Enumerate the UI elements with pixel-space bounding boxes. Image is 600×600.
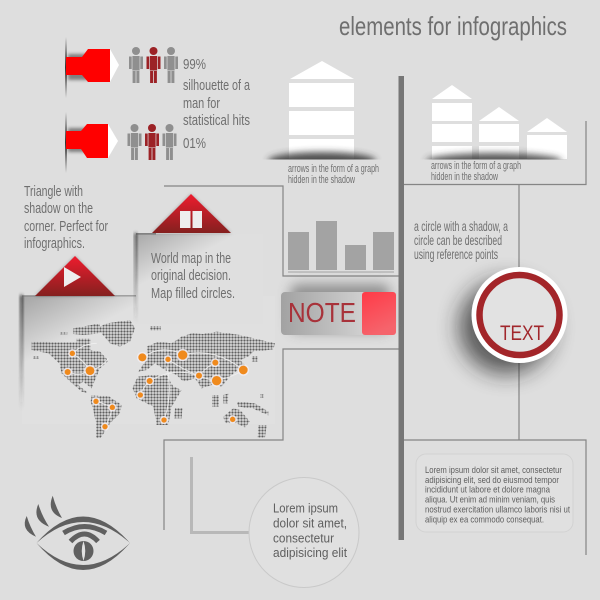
lorem circle — [249, 478, 359, 588]
left graph caption: arrows in the form of a graph — [288, 163, 379, 175]
paper panel upper — [134, 233, 263, 324]
route lines — [68, 343, 243, 427]
icon: eye — [25, 496, 130, 570]
statistics text: man for — [183, 95, 220, 112]
right graph caption — [431, 160, 521, 183]
house arrow graph left — [268, 61, 376, 170]
location markers — [65, 350, 248, 429]
lorem text box: aliquip ex ea commodo consequat. — [425, 514, 544, 526]
circle description: using reference points — [414, 246, 498, 262]
world map description: original decision. — [151, 267, 231, 284]
world map description — [151, 250, 235, 302]
statistics text: statistical hits — [183, 112, 250, 129]
right graph caption: arrows in the form of a graph — [431, 160, 521, 172]
world map description: Map filled circles. — [151, 285, 235, 302]
lorem text box: incididunt ut labore et dolore magna — [425, 484, 551, 496]
circle description: a circle with a shadow, a — [414, 218, 508, 234]
statistics text — [183, 56, 250, 152]
people icons bottom — [128, 124, 176, 160]
circle with shadow: TEXT — [500, 322, 544, 345]
triangle description: infographics. — [24, 235, 85, 252]
people icons top — [129, 47, 178, 83]
statistics text: silhouette of a — [183, 77, 250, 94]
lorem text box: nostrud exercitation ullamco laboris nisi ut — [425, 504, 570, 516]
connector lines — [164, 121, 586, 555]
lorem text box — [416, 454, 573, 532]
statistics text: 01% — [183, 135, 206, 152]
statistics text: 99% — [183, 56, 206, 73]
triangle description: corner. Perfect for — [24, 218, 108, 235]
lorem text box: adipisicing elit, sed do eiusmod tempor — [425, 475, 559, 486]
note label — [281, 284, 396, 335]
circle with shadow — [459, 267, 568, 374]
bar chart — [288, 221, 394, 272]
house arrow graph right — [426, 85, 567, 169]
circle description: circle can be described — [414, 232, 502, 248]
left graph caption: hidden in the shadow — [288, 174, 355, 186]
world map — [27, 315, 277, 441]
central vertical bar — [398, 76, 404, 540]
triangle with pause icon — [152, 194, 231, 233]
left graph caption — [288, 163, 379, 186]
world map description: World map in the — [151, 250, 231, 267]
lorem circle: adipisicing elit — [273, 545, 347, 560]
triangle description: Triangle with — [24, 183, 83, 200]
lorem circle: Lorem ipsum — [273, 500, 338, 516]
triangle description — [24, 183, 108, 252]
note label: NOTE — [288, 297, 356, 328]
lorem circle: consectetur — [273, 530, 335, 546]
right graph caption: hidden in the shadow — [431, 171, 498, 183]
lorem text box: aliqua. Ut enim ad minim veniam, quis — [425, 494, 555, 506]
triangle with play icon — [35, 256, 115, 296]
lorem circle: dolor sit amet, — [273, 516, 347, 530]
gray L bracket — [192, 457, 250, 532]
red tab top — [65, 37, 119, 98]
lorem text box: Lorem ipsum dolor sit amet, consectetur — [425, 465, 562, 476]
triangle description: shadow on the — [24, 200, 93, 217]
circle description — [414, 218, 508, 262]
paper panel lower — [20, 295, 275, 424]
red tab bottom — [65, 112, 118, 173]
